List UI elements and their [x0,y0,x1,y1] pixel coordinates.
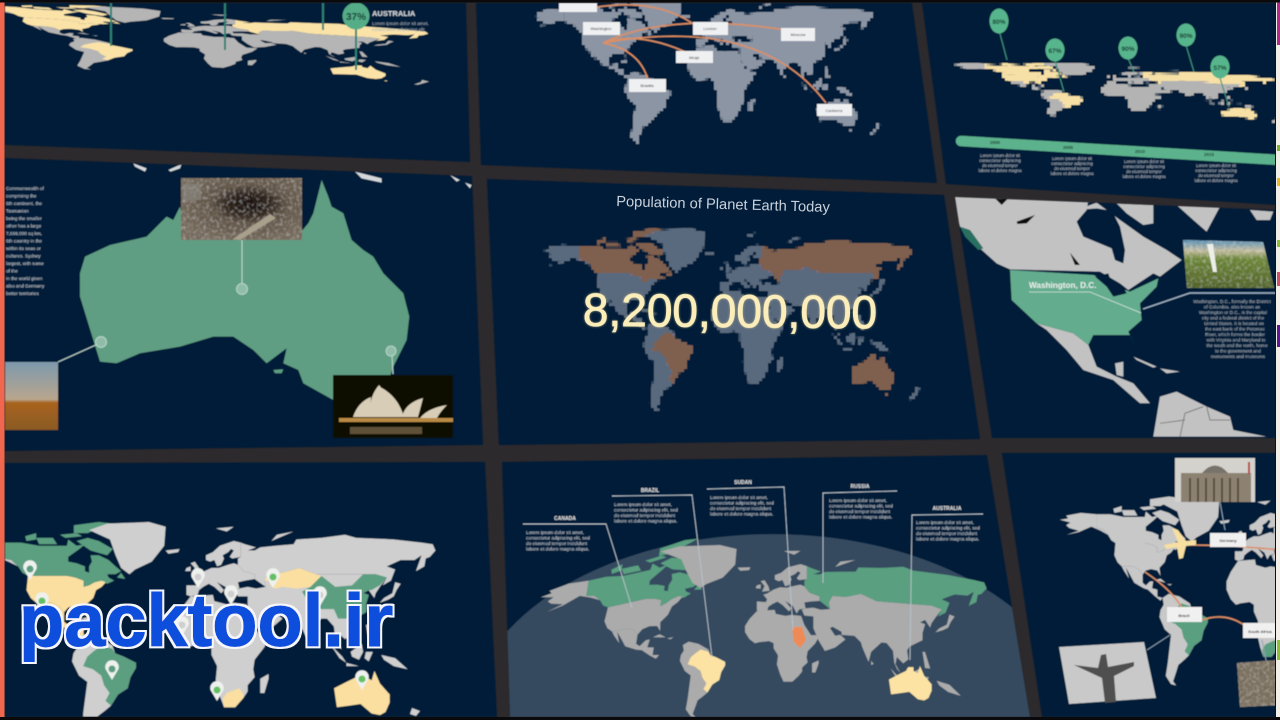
panel: USA map [953,197,1276,438]
callout: Sudan: consectetur adipiscing elit, sed [710,500,774,506]
text block: description: United States. It is located on [1204,321,1264,326]
North America [540,538,702,660]
text block: description: the east bank of the Potomac [1205,326,1266,332]
timeline band: 2000 [990,140,1001,145]
left text block: largest, with some [6,261,44,266]
Australia shape and islands [80,163,472,400]
callout: Russia [829,484,893,520]
timeline captions: consectetur adipiscing [1195,168,1237,173]
location labels: South Africa [1248,629,1273,634]
left text block: 7,688,000 sq km, [6,231,42,236]
left text block: Tasmanian [6,208,29,214]
Eurasia [738,546,987,698]
left text block: of the [6,268,18,274]
text block: description: with Virginia and Maryland to [1207,338,1266,342]
centre heading: Population of Planet Earth Today [616,194,831,216]
left text block: being the smaller [6,216,42,221]
timeline captions: do eiusmod tempor [1198,173,1235,178]
text block: description: Washington or D.C., is the capital [1199,310,1267,315]
left text block: Commonwealth of [6,186,44,191]
timeline captions: labore et dolore magna [1050,171,1094,176]
country label [372,9,429,32]
timeline captions: labore et dolore magna [1194,178,1238,183]
text block: description: the south and the north, home [1206,343,1268,348]
panel: bottom-middle globe map [502,454,1030,717]
timeline captions: do eiusmod tempor [1126,169,1163,174]
panel: top-right map with percentage pins: 90% [1179,33,1193,40]
callout: Sudan [710,480,774,516]
leader lines [523,487,983,660]
text block: description: city and a federal district of the [1202,316,1265,320]
dotted population world map [542,229,920,412]
location labels [1167,533,1277,638]
connector lines [1147,502,1267,665]
callout: Brazil: labore et dolore magna aliqua. [614,518,677,524]
city labels: Moscow [791,32,805,37]
photo: outback [5,362,58,430]
callout: Russia: do eiusmod tempor incididunt [829,509,891,514]
callout: Brazil: do eiusmod tempor incididunt [614,513,676,518]
panel: top-left world map [0,0,470,162]
text block: description: monuments and museums [1211,354,1266,359]
timeline captions: labore et dolore magna [1122,174,1166,179]
callout: Brazil: BRAZIL [641,488,659,494]
pin lines [111,3,356,70]
callout: Australia: labore et dolore magna aliqua. [916,536,979,542]
callout: Australia: AUSTRALIA [933,506,962,512]
pin centres [26,566,366,694]
callout: Canada: CANADA [554,516,576,522]
panel: Australia map [5,158,483,451]
timeline captions: Lorem ipsum dolor sit [1196,163,1237,168]
timeline band: 2010 [1135,149,1146,154]
callout: Canada: Lorem ipsum dolor sit amet, [526,530,584,535]
callout: Australia: Lorem ipsum dolor sit amet, [916,520,974,525]
headline number: 8,200,000,000 [583,284,877,338]
timeline captions: do eiusmod tempor [1054,166,1091,171]
timeline captions: Lorem ipsum dolor sit [1052,156,1093,161]
Greenland [661,545,737,588]
world map [1060,496,1280,686]
callout: Brazil: consectetur adipiscing elit, sed [614,508,678,512]
city labels: Washington [591,26,611,31]
callout: Australia: do eiusmod tempor incididunt [916,531,978,536]
panel: bottom-left world map [0,462,497,717]
photo: wombat [181,178,302,240]
timeline captions: consectetur adipiscing [1123,164,1165,169]
callout: Russia: RUSSIA [851,484,870,490]
panel: top-right map with percentage pins: 90% [1121,46,1135,53]
dotted world map [531,0,881,144]
world map [953,62,1275,124]
panel: top-middle flight routes map [476,0,937,183]
callout: Brazil: Lorem ipsum dolor sit amet, [614,502,672,507]
country label: Lorem ipsum dolor sit amet, [372,21,429,26]
callout: Canada: do eiusmod tempor incididunt [526,541,588,546]
city labels: Brasilia [640,83,654,88]
callout: Sudan: Lorem ipsum dolor sit amet, [710,495,768,500]
location labels: Germany [1219,538,1237,543]
leader lines and markers [58,240,393,374]
panel: top-right map with percentage pins [922,3,1280,205]
callout: Australia [916,506,980,542]
left text block: comprising the [6,194,37,198]
left text block: 6th continent, the [6,201,42,206]
left text block: in the world given [6,276,43,281]
percentage badge [342,2,370,30]
callout: Canada: consectetur adipiscing elit, sed [526,536,590,540]
callout: Russia: consectetur adipiscing elit, sed [829,504,893,508]
panel: top-right map with percentage pins: 67% [1048,48,1062,55]
right edge strip [1275,0,1280,720]
text block: description: Washington, D.C., formally the District [1193,299,1271,304]
left text block: 6th country in the [6,238,42,244]
South America [680,642,725,717]
timeline band [961,140,1280,160]
city label: Washington, D.C.: Washington, D.C. [1029,281,1096,290]
text block: description: to the government and [1215,348,1261,354]
left text block: also and Germany [6,284,45,288]
callout: Canada [526,516,590,552]
callout: Sudan: SUDAN [734,480,752,486]
plane icon [1164,528,1196,559]
left text block [6,186,45,296]
Sudan highlight [792,627,806,648]
city labels: Abuja [689,55,700,60]
left text block: other has a large [6,224,42,228]
timeline captions: consectetur adipiscing [979,158,1021,163]
timeline band: 2005 [1063,145,1074,150]
small island [410,708,420,716]
photo: Christ the Redeemer [1059,642,1156,704]
globe dome [506,534,1030,717]
timeline captions: consectetur adipiscing [1051,161,1093,166]
left text block: cultures. Sydney [6,254,41,258]
connector lines [1029,292,1276,313]
panel: bottom-right travel map [1002,453,1280,717]
watermark: packtool.ir [19,579,393,662]
timeline captions: labore et dolore magna [978,168,1022,173]
route arcs [1145,545,1280,625]
location labels: Brazil [1179,613,1189,618]
callout: Russia: Lorem ipsum dolor sit amet, [829,498,887,503]
callout: Australia: consectetur adipiscing elit, sed [916,526,980,530]
callout: Sudan: do eiusmod tempor incididunt [710,506,772,511]
callout: Russia: labore et dolore magna aliqua. [829,514,892,520]
world map with highlighted countries [0,0,429,90]
North America regions [953,197,1273,437]
text block: description [1193,299,1271,359]
photo: Reichstag [1175,458,1255,502]
panel: population centre [487,179,980,445]
world map with coloured countries [0,522,435,717]
panel: top-right map with percentage pins: 57% [1213,65,1227,72]
Australia [889,666,932,701]
photo: Washington monument [1183,240,1274,288]
country label: AUSTRALIA [372,9,416,18]
city labels [559,2,852,116]
city labels: London [703,26,717,31]
route arcs [581,5,826,103]
city labels: Canberra [826,108,843,113]
country label: consectetur adipiscing elit [372,27,425,32]
text block: description: River, which forms the border [1205,332,1265,337]
Africa [745,610,820,682]
text block: description: of Columbia, also known as [1204,304,1261,310]
photo: South African landscape [1237,660,1280,707]
timeline captions [978,153,1238,183]
pin stems [999,30,1229,107]
callout: Brazil [614,488,678,524]
timeline captions: do eiusmod tempor [982,163,1019,168]
timeline captions: Lorem ipsum dolor sit [980,153,1021,158]
panel: top-right map with percentage pins: 80% [992,19,1006,26]
left text block: within its seas or [6,246,41,251]
left text block: better territories [6,291,39,296]
timeline captions: Lorem ipsum dolor sit [1124,159,1165,164]
timeline band: 2015 [1204,152,1215,157]
photo: Sydney Opera House [333,375,453,438]
location pins [23,560,369,701]
left edge strip [0,0,4,720]
callout: Sudan: labore et dolore magna aliqua. [710,512,773,516]
percentage badge: 37% [346,12,366,23]
callout: Canada: labore et dolore magna aliqua. [526,546,589,552]
percentage pins [990,8,1230,78]
